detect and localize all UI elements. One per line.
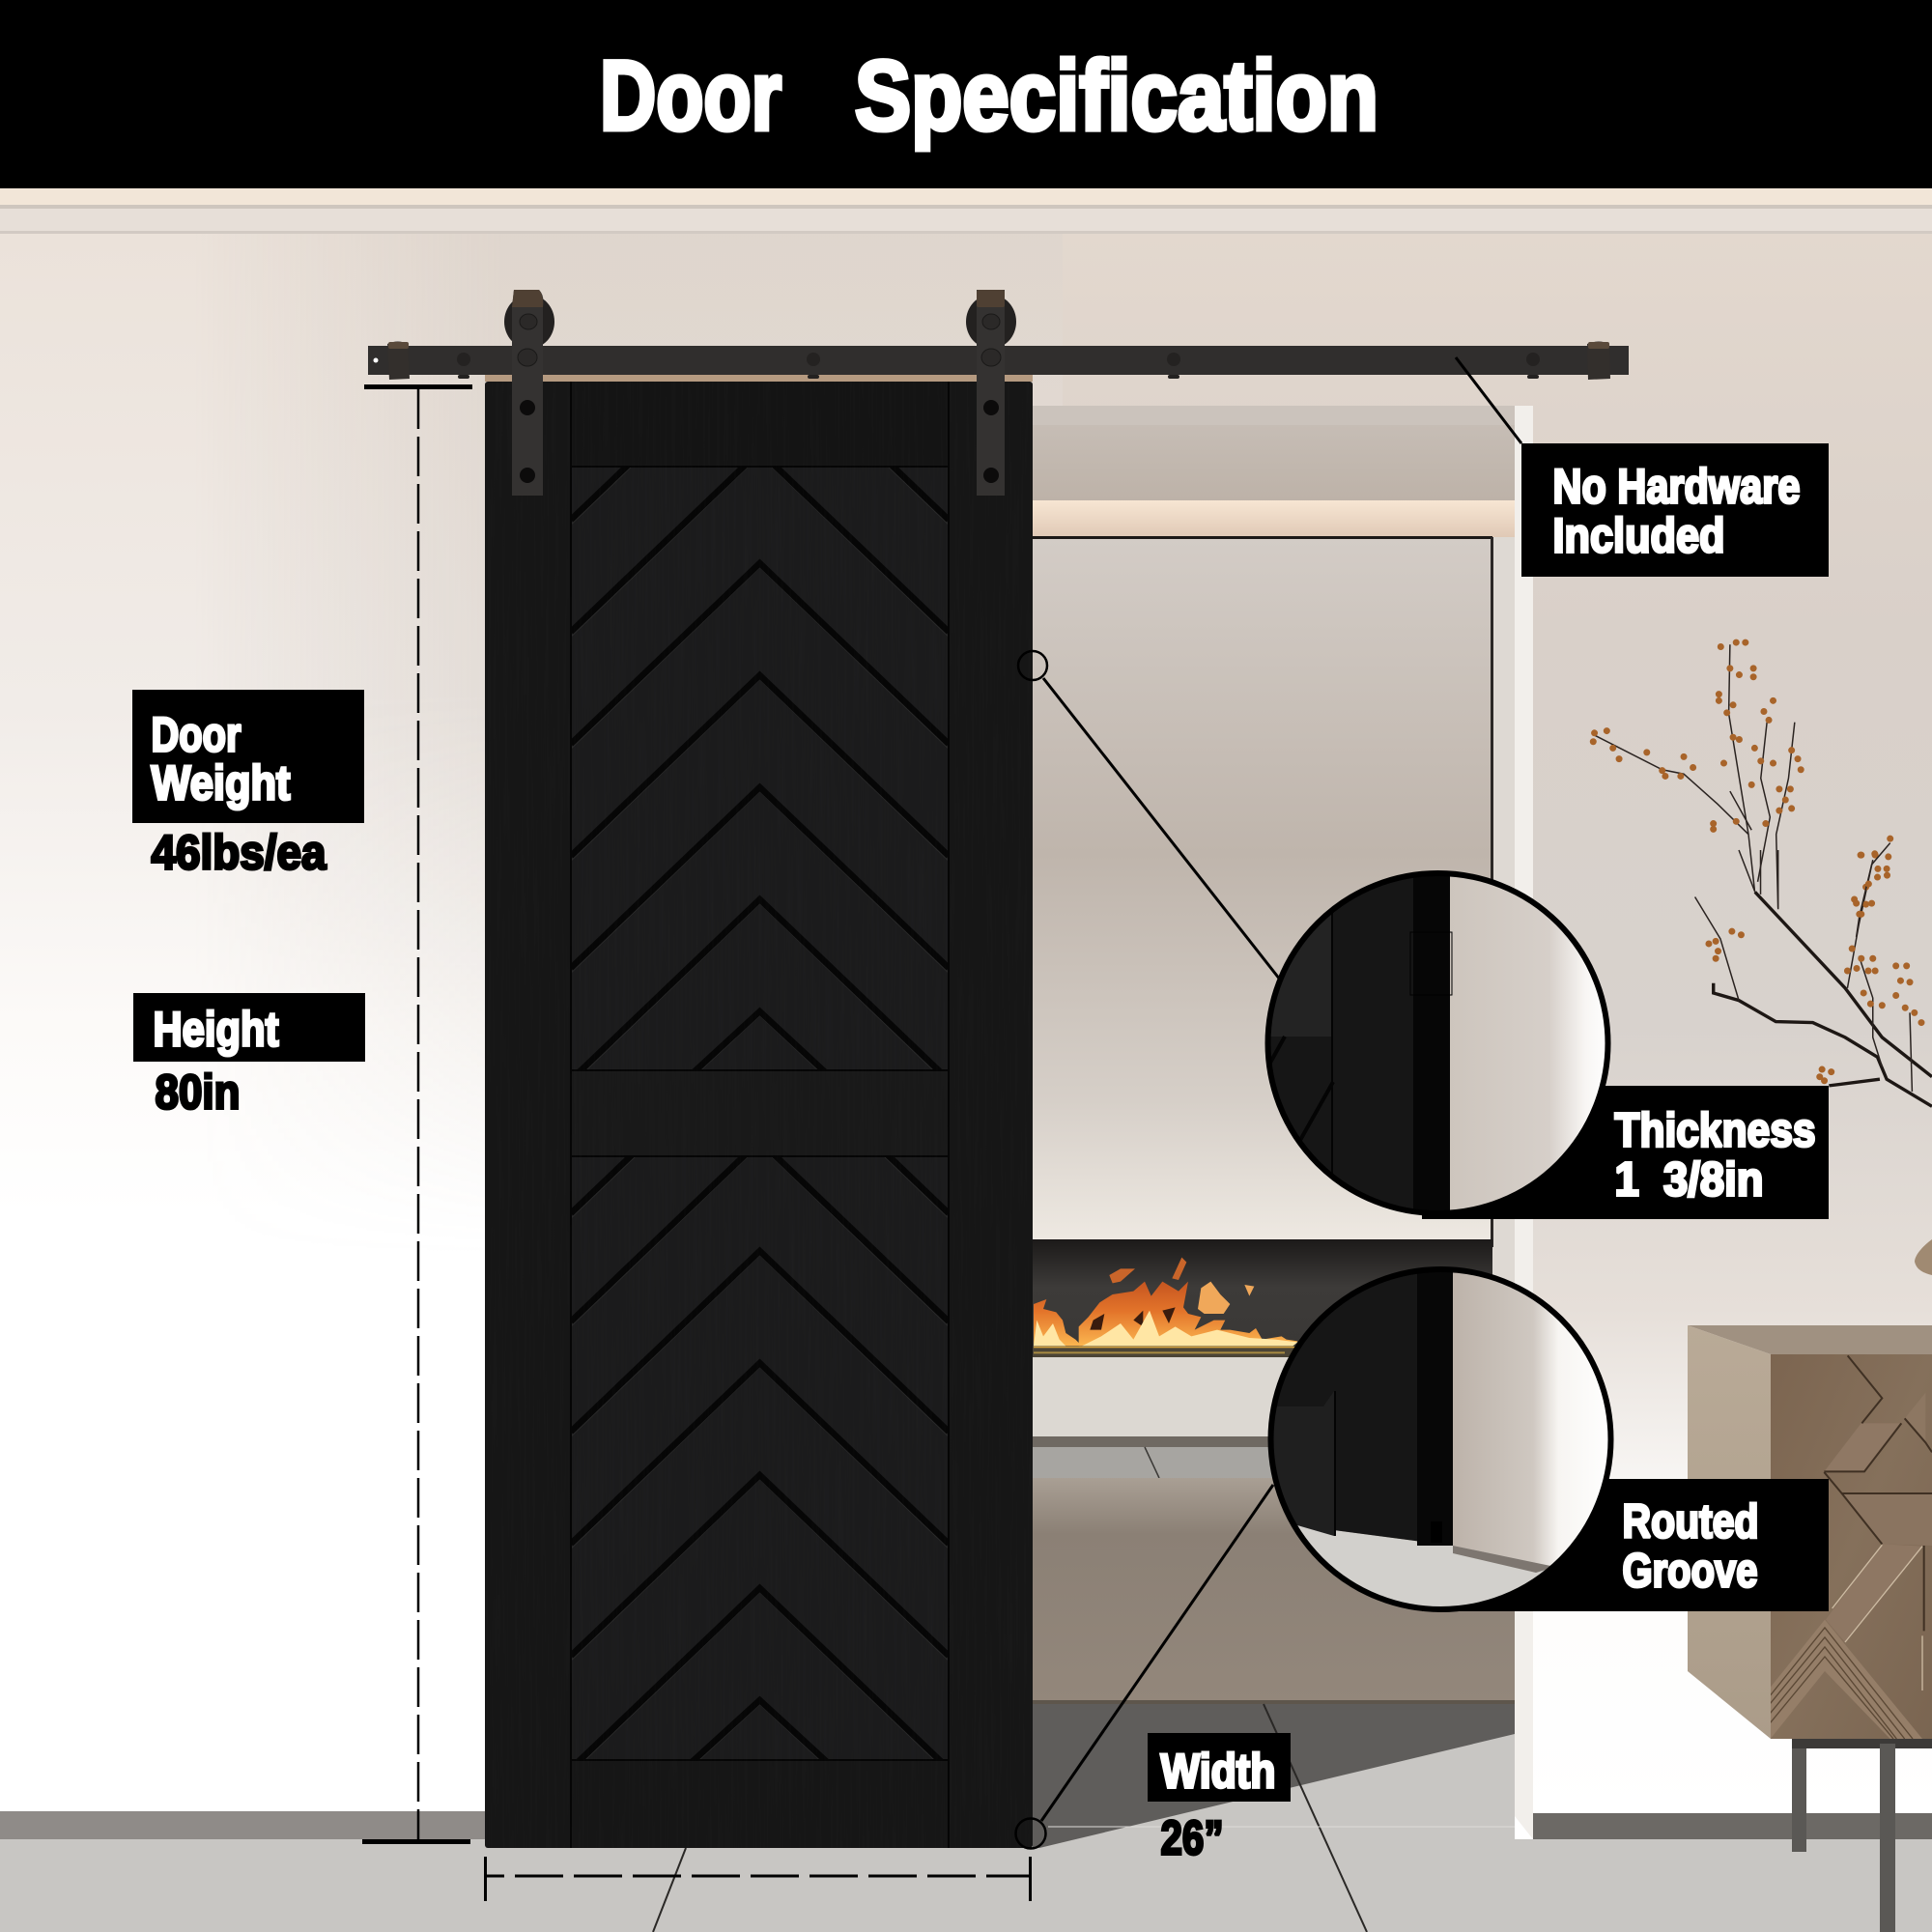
barn door hardware: track rail bbox=[368, 342, 1629, 382]
callout: door weight: Weight bbox=[151, 755, 291, 810]
magnifier: door edge detail bbox=[1261, 869, 1614, 1217]
barn door hardware: left hanger bbox=[504, 290, 554, 496]
fireplace flames bbox=[1034, 1258, 1297, 1353]
header band with title: Door bbox=[600, 41, 781, 151]
floor tile joint bbox=[653, 1848, 686, 1932]
callout: routed groove with magnifier: Groove bbox=[1623, 1546, 1758, 1598]
callout: thickness with magnifier: 1 3/8in bbox=[1615, 1153, 1764, 1206]
callout: width: Width bbox=[1161, 1745, 1275, 1799]
rail bolts bbox=[457, 353, 1540, 379]
cabinet bbox=[1688, 1325, 1932, 1932]
callout: width: 26” bbox=[1161, 1810, 1223, 1864]
callout: no hardware included: No Hardware bbox=[1553, 460, 1801, 514]
lower chevron panel bbox=[572, 1157, 948, 1759]
rail stops bbox=[387, 342, 410, 380]
doorway interior scene bbox=[1033, 406, 1533, 1932]
upper chevron panel bbox=[572, 468, 948, 1069]
header band with title: Specification bbox=[855, 41, 1378, 151]
cabinet front relief pattern bbox=[1771, 1355, 1932, 1739]
callout: width bbox=[1148, 1733, 1291, 1864]
wood grain bbox=[485, 382, 1033, 1848]
header band with title bbox=[0, 0, 1932, 188]
callout: height: Height bbox=[153, 1003, 279, 1057]
callout: thickness with magnifier: Thickness bbox=[1615, 1105, 1816, 1157]
barn door hardware: right hanger bbox=[966, 290, 1016, 496]
callout: no hardware included: Included bbox=[1553, 508, 1725, 562]
door rails bbox=[571, 382, 949, 467]
decorative branches with berries bbox=[1593, 642, 1932, 1106]
barn door bbox=[485, 339, 1033, 1848]
door stiles and base bbox=[485, 382, 1033, 1848]
vase edge bbox=[1915, 1239, 1932, 1275]
callout: door weight: Door bbox=[151, 707, 242, 761]
height dimension line bbox=[362, 384, 472, 1844]
callout: height bbox=[133, 993, 365, 1119]
callout: thickness with magnifier bbox=[1018, 651, 1829, 1219]
width dimension line bbox=[484, 1857, 1032, 1901]
callout: routed groove with magnifier: Routed bbox=[1623, 1495, 1758, 1548]
callout: door weight bbox=[132, 690, 364, 879]
callout: door weight: 46lbs/ea bbox=[151, 825, 327, 879]
callout: routed groove with magnifier bbox=[1016, 1265, 1829, 1849]
magnifier: door bottom detail bbox=[1273, 1272, 1607, 1606]
callout: no hardware included bbox=[1456, 357, 1829, 577]
callout: height: 80in bbox=[155, 1065, 240, 1119]
